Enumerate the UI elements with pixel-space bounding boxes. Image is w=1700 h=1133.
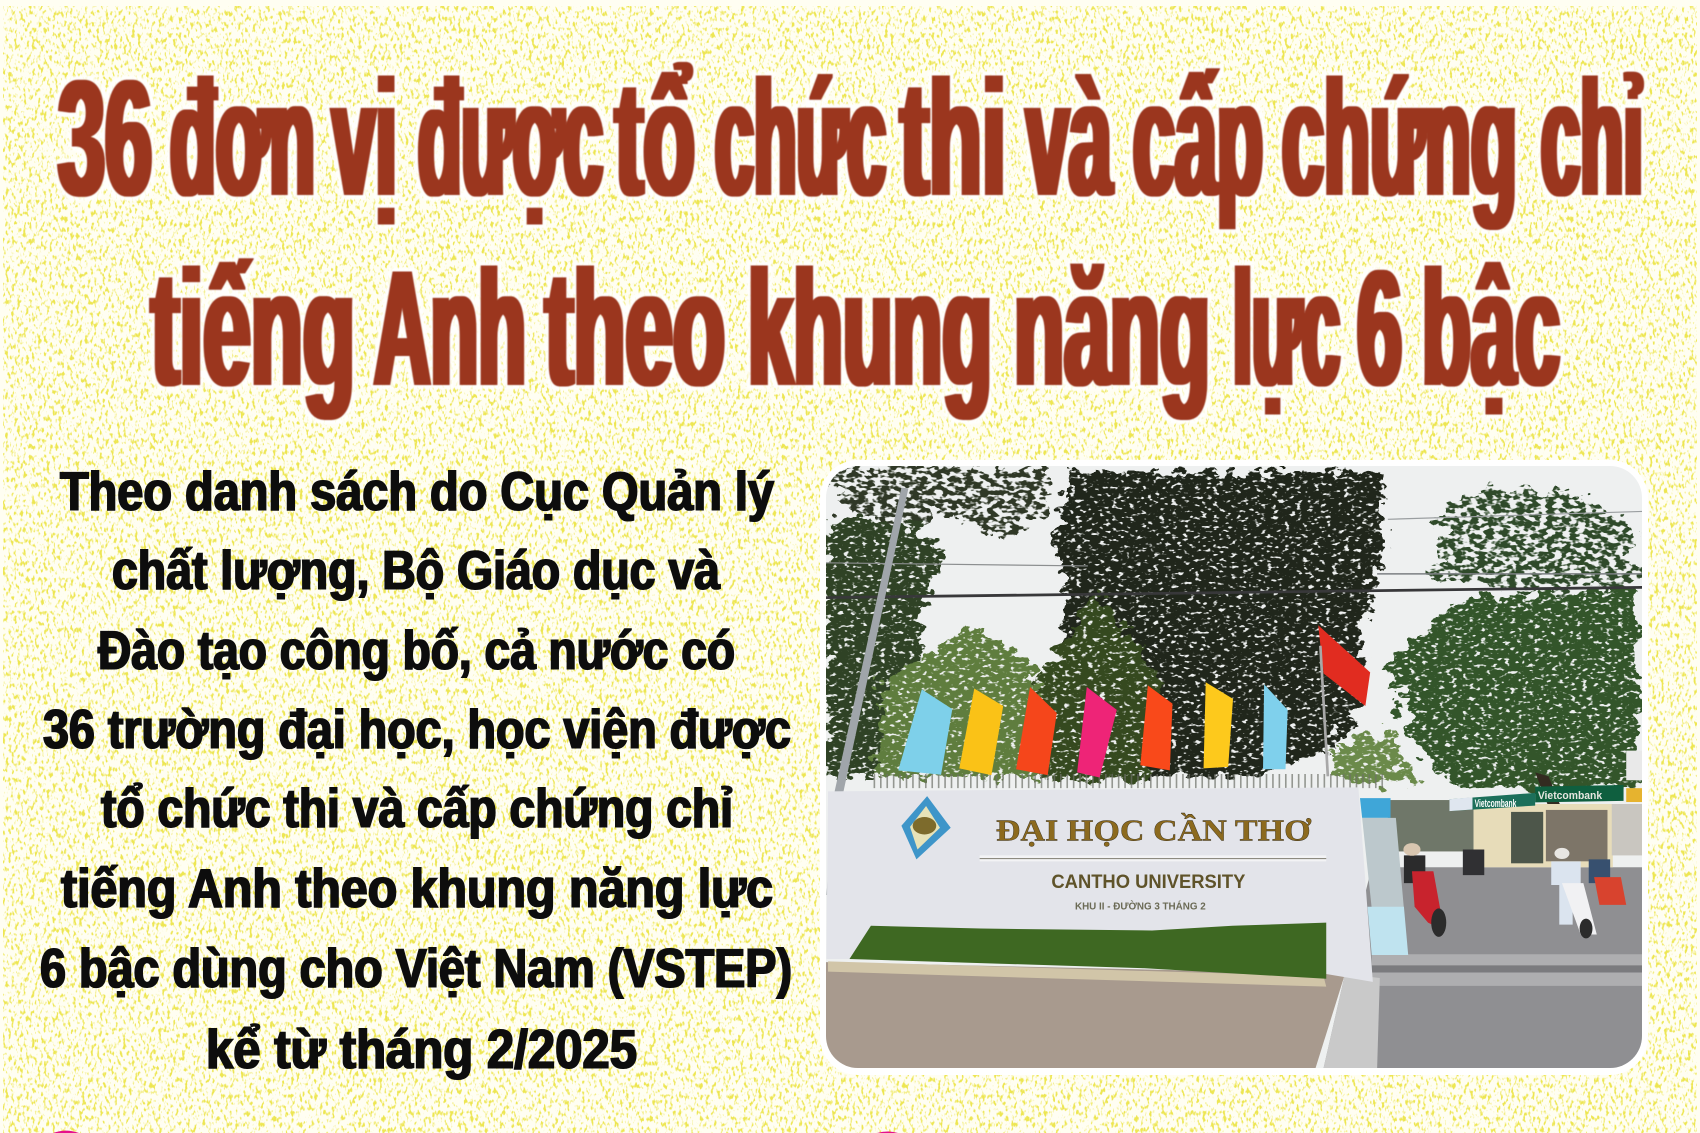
intro text block: Đào tạo công bố, cả nước có xyxy=(98,619,735,681)
intro text block xyxy=(40,460,792,1080)
wall lettering: KHU II - ĐƯỜNG 3 THÁNG 2 xyxy=(1075,899,1206,912)
title: vị xyxy=(332,46,397,230)
title: tiếng xyxy=(151,236,355,420)
motorbikes and riders xyxy=(1403,843,1626,938)
title: khung xyxy=(748,236,992,420)
title xyxy=(58,46,1643,420)
wall lettering xyxy=(996,813,1312,912)
intro text block: tiếng Anh theo khung năng lực xyxy=(61,857,773,919)
wall lettering: ĐẠI HỌC CẦN THƠ xyxy=(996,813,1312,847)
title: thi xyxy=(900,46,1006,230)
title: lực xyxy=(1233,236,1340,420)
Vietcombank building xyxy=(1388,751,1642,867)
university wall xyxy=(826,787,1373,982)
wall lettering: CANTHO UNIVERSITY xyxy=(1051,871,1246,892)
title: và xyxy=(1026,46,1113,230)
pavement xyxy=(825,962,1345,1068)
hedge xyxy=(849,923,1326,979)
title: Anh xyxy=(374,236,526,420)
light pole xyxy=(826,488,908,895)
intro text block: kể từ tháng 2/2025 xyxy=(206,1018,637,1080)
title: năng xyxy=(1014,236,1210,420)
road xyxy=(1324,867,1642,1068)
title: theo xyxy=(545,236,725,420)
trees xyxy=(825,468,1640,855)
gate post and blue sign xyxy=(1360,798,1408,955)
title: được xyxy=(418,46,603,230)
fence xyxy=(874,774,1383,788)
title: 6 xyxy=(1357,236,1402,420)
title: chức xyxy=(715,46,886,230)
title: cấp xyxy=(1133,46,1263,230)
intro text block: chất lượng, Bộ Giáo dục và xyxy=(112,539,720,601)
pink circle marker, left xyxy=(53,1131,79,1133)
pink circle marker, right xyxy=(877,1132,898,1133)
intro text block: tổ chức thi và cấp chứng chỉ xyxy=(101,777,733,839)
festival flags xyxy=(898,625,1370,778)
power lines xyxy=(825,511,1642,598)
title: bậc xyxy=(1422,236,1560,420)
Vietcombank building: Vietcombank xyxy=(1475,797,1517,810)
intro text block: 6 bậc dùng cho Việt Nam (VSTEP) xyxy=(40,937,792,999)
title: 36 xyxy=(58,46,152,230)
university logo xyxy=(901,796,951,859)
title: tổ xyxy=(615,46,695,230)
photo frame xyxy=(820,460,1648,1075)
intro text block: 36 trường đại học, học viện được xyxy=(43,698,791,760)
sky xyxy=(820,460,1660,1080)
photo: Can Tho University gate xyxy=(820,460,1660,1080)
intro text block: Theo danh sách do Cục Quản lý xyxy=(60,460,774,522)
Vietcombank building: Vietcombank xyxy=(1538,789,1603,802)
title: đơn xyxy=(170,46,315,230)
